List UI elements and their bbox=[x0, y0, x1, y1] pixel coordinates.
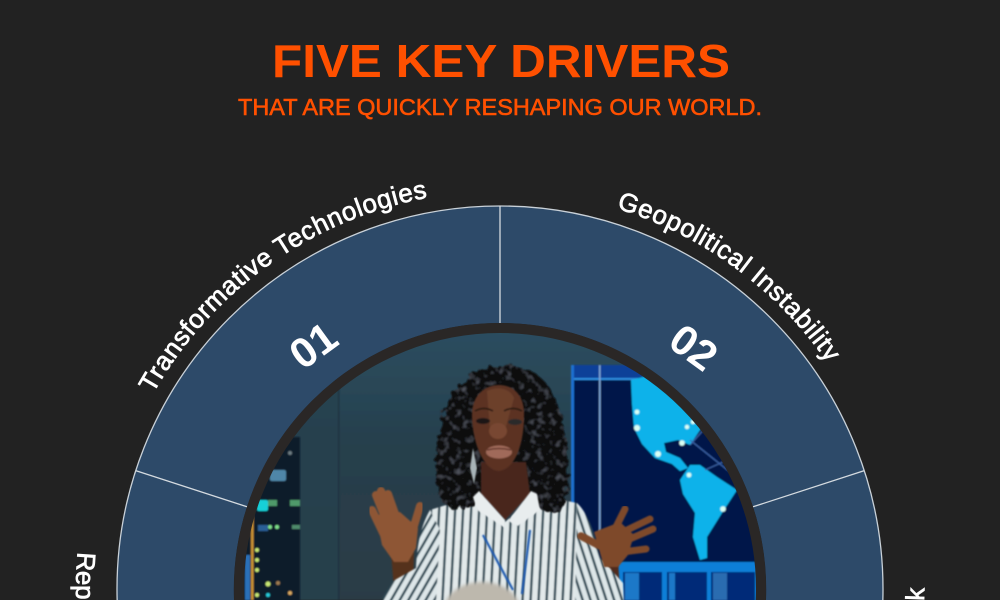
ring segment: lower left bbox=[117, 471, 247, 600]
ring outline bbox=[117, 206, 883, 600]
photo: server rack bbox=[244, 436, 301, 600]
right forearm bbox=[608, 565, 620, 580]
ring segment: lower right bbox=[753, 471, 883, 600]
ring dividers bbox=[136, 206, 864, 507]
number 01: 01 bbox=[281, 313, 346, 378]
map: north america bbox=[630, 376, 701, 472]
neck bbox=[481, 462, 530, 520]
photo wall bbox=[294, 333, 624, 600]
shirt bbox=[383, 495, 624, 600]
segmented ring bbox=[117, 206, 883, 600]
ring segment: transformative technologies bbox=[136, 206, 500, 507]
photo border ring bbox=[239, 328, 761, 600]
map: data panel bbox=[617, 562, 759, 600]
hair bbox=[436, 365, 568, 512]
collar bbox=[473, 491, 540, 528]
photo: woman bbox=[372, 365, 653, 600]
lanyard bbox=[483, 530, 530, 594]
number 02: 02 bbox=[661, 315, 726, 380]
map: lights bbox=[634, 410, 726, 512]
ring segment: geopolitical instability bbox=[500, 206, 864, 507]
right hand bbox=[581, 509, 653, 567]
map: south america bbox=[680, 465, 737, 560]
left forearm bbox=[390, 552, 415, 582]
listener's head bbox=[444, 582, 520, 600]
photo: presenter in front of world map bbox=[244, 333, 756, 600]
label: lower left, cut off: Rep bbox=[70, 554, 96, 599]
earring bbox=[470, 448, 477, 484]
left hand bbox=[372, 491, 420, 562]
map: connection lines bbox=[688, 430, 728, 472]
subtitle: THAT ARE QUICKLY RESHAPING OUR WORLD. bbox=[238, 94, 762, 120]
photo: map screen bbox=[570, 364, 756, 600]
face bbox=[472, 385, 524, 471]
title: FIVE KEY DRIVERS bbox=[272, 35, 730, 87]
label: geopolitical instability: Geopolitical Instability bbox=[620, 193, 840, 360]
label: transformative technologies: Transformative Technologies bbox=[138, 184, 426, 388]
